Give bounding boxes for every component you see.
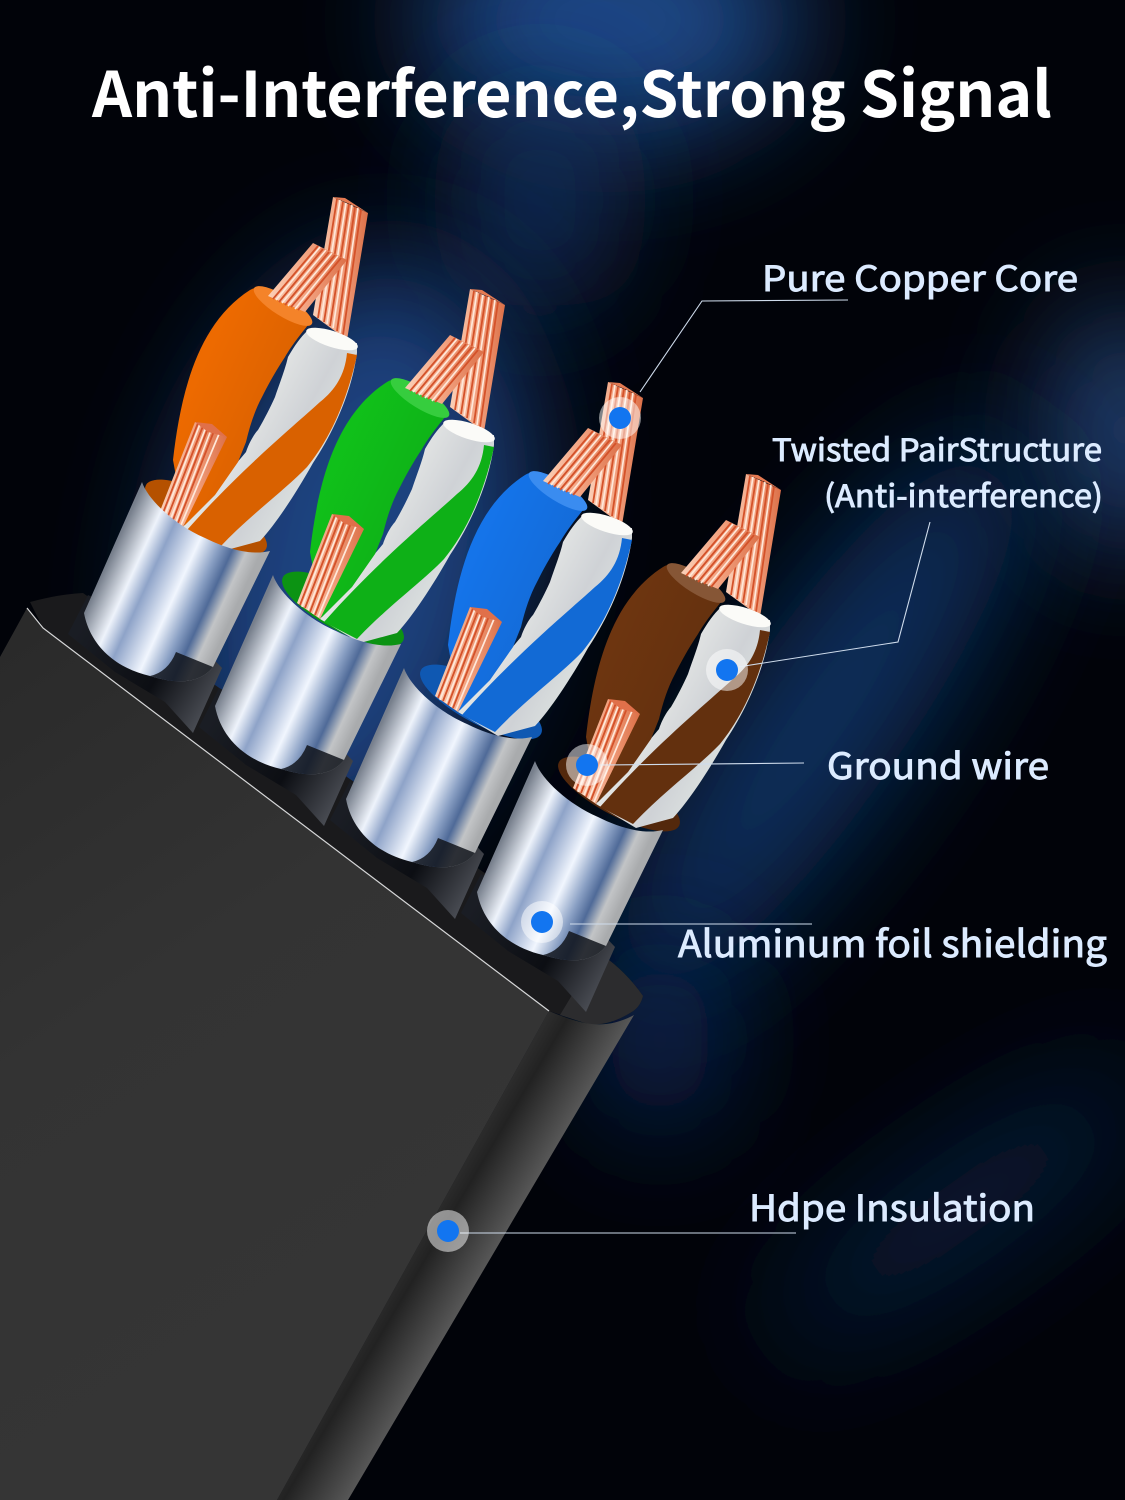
wire pair: blue	[330, 382, 643, 919]
callout: ground wire: Ground wire	[827, 738, 1049, 790]
callout: ground wire	[566, 738, 1049, 790]
cable jacket: HDPE insulation body	[0, 593, 643, 1500]
wire pair: orange	[68, 197, 368, 733]
callout: twisted pair structure: (Anti-interference)	[824, 471, 1103, 516]
callout: twisted pair structure: Twisted PairStructure	[772, 425, 1102, 470]
title: Anti-Interference,Strong Signal	[91, 45, 1052, 136]
callout: pure copper core	[599, 251, 1078, 439]
callout: twisted pair structure	[706, 425, 1103, 691]
callout: hdpe insulation	[427, 1180, 1035, 1252]
callout: pure copper core: Pure Copper Core	[762, 251, 1078, 302]
callout: aluminum foil shielding: Aluminum foil shielding	[678, 914, 1107, 968]
callout: hdpe insulation: Hdpe Insulation	[749, 1180, 1035, 1232]
wire pair: brown	[461, 474, 781, 1012]
wire pair: green	[199, 289, 505, 826]
callout: aluminum foil shielding	[521, 901, 1107, 968]
